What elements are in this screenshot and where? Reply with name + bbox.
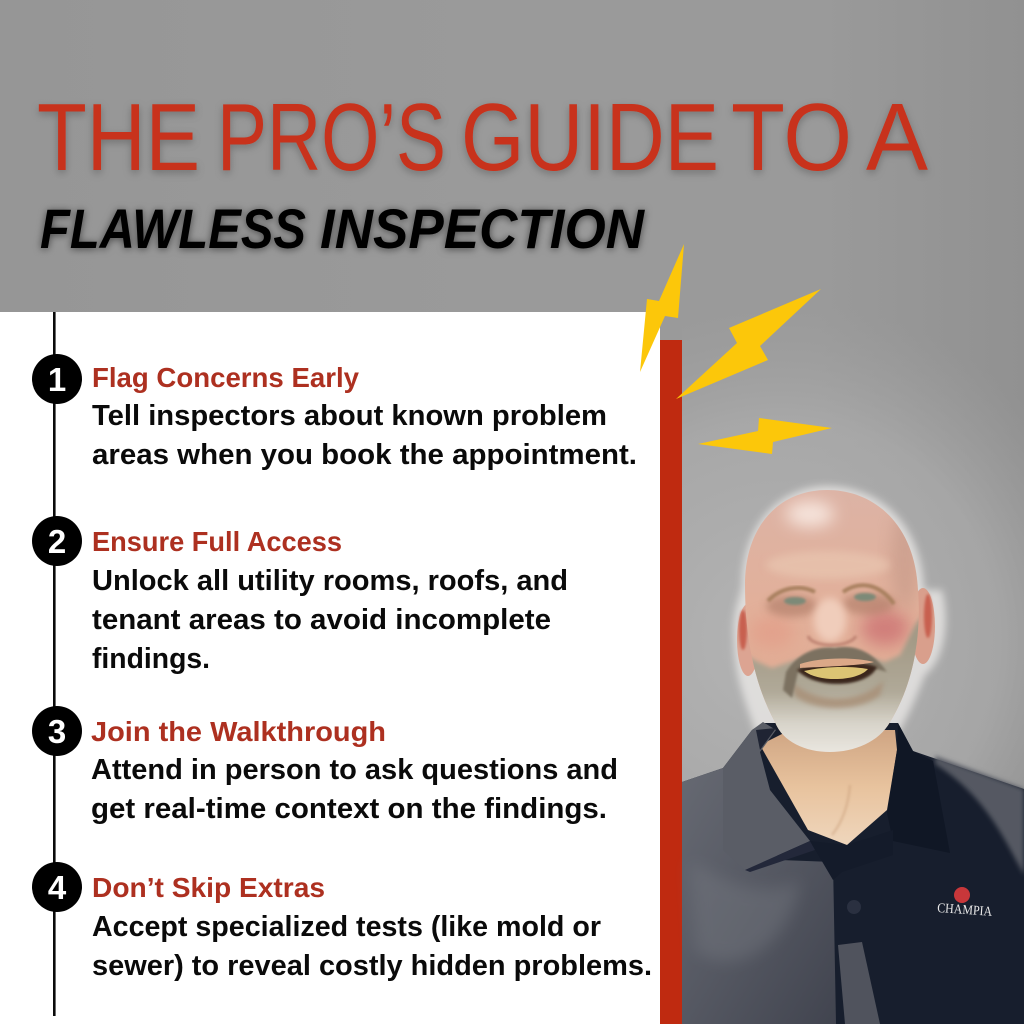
step 2 number badge	[32, 516, 82, 566]
step 1 body: areas when you book the appointment.	[92, 439, 637, 471]
placket gray strip	[838, 942, 880, 1024]
step 4	[32, 862, 652, 982]
title line 1: TO	[731, 84, 852, 191]
shirt button	[847, 900, 861, 914]
step 3 body	[91, 754, 618, 825]
left collar	[723, 722, 810, 870]
step 4 number badge	[32, 862, 82, 912]
eye socket shadows	[766, 595, 818, 617]
shirt logo: CHAMPIA	[937, 900, 993, 919]
step 4 heading: Don’t Skip Extras	[92, 872, 325, 903]
step 4 body: Accept specialized tests (like mold or	[92, 911, 601, 943]
shirt logo	[937, 887, 993, 919]
step 1 number badge: 1	[48, 361, 66, 398]
step 4 body: sewer) to reveal costly hidden problems.	[92, 950, 652, 982]
title line 2: INSPECTION	[320, 197, 645, 260]
step 1	[32, 354, 637, 471]
step 2 body: tenant areas to avoid incomplete	[92, 604, 551, 636]
ears	[737, 588, 935, 676]
portrait photo	[682, 486, 1024, 1024]
step 3 heading: Join the Walkthrough	[91, 716, 386, 747]
step 1 body: Tell inspectors about known problem	[92, 400, 607, 432]
step 2	[32, 516, 568, 675]
step 1 number badge	[32, 354, 82, 404]
right gray sleeve	[935, 756, 1024, 875]
shirt body	[682, 723, 1024, 1024]
step 3	[32, 706, 618, 825]
head	[745, 490, 925, 770]
step 3 body: Attend in person to ask questions and	[91, 754, 618, 786]
eyes and brows	[768, 585, 894, 605]
mustache	[783, 647, 887, 698]
title line 2: FLAWLESS	[40, 197, 306, 260]
icon: lightning bolt 1	[640, 244, 684, 372]
step 1 body	[92, 400, 637, 471]
step 2 number badge: 2	[48, 523, 66, 560]
step 4 number badge: 4	[48, 869, 67, 906]
title line 1: A	[866, 84, 928, 191]
step 2 body: findings.	[92, 643, 210, 675]
step 3 number badge	[32, 706, 82, 756]
title line 2	[40, 197, 645, 260]
title line 1: THE	[37, 84, 200, 191]
icon: lightning bolt 2	[676, 289, 821, 399]
timeline line	[53, 312, 56, 1016]
title line 1: GUIDE	[461, 84, 719, 191]
step 3 number badge: 3	[48, 713, 66, 750]
step 2 heading: Ensure Full Access	[92, 526, 342, 557]
step 3 body: get real-time context on the findings.	[91, 793, 607, 825]
nose	[808, 598, 856, 645]
halo glow	[734, 486, 946, 745]
left gray sleeve	[682, 768, 836, 1024]
neck	[760, 730, 897, 845]
right collar	[887, 723, 950, 853]
beard	[752, 616, 918, 752]
red vertical bar	[660, 340, 682, 1024]
icon: lightning bolt 3	[698, 418, 832, 454]
skin patch around mouth	[792, 680, 884, 708]
mouth	[797, 658, 877, 684]
step 2 body	[92, 565, 568, 675]
step 4 body	[92, 911, 652, 982]
step 1 heading: Flag Concerns Early	[92, 362, 360, 393]
title line 1: PRO’S	[217, 84, 446, 191]
step 2 body: Unlock all utility rooms, roofs, and	[92, 565, 568, 597]
title line 1	[37, 84, 928, 191]
white content panel	[0, 312, 660, 1024]
